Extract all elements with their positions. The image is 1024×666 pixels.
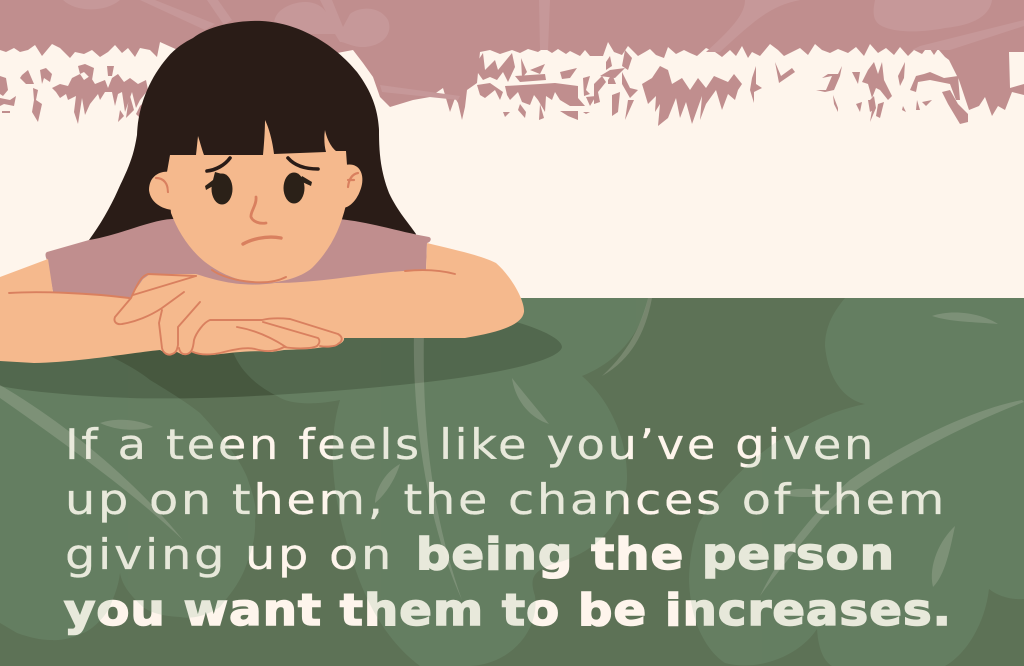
leaf veins and small leaves [0, 298, 1024, 600]
eyes and lashes [205, 172, 312, 204]
shirt [46, 219, 431, 300]
decorative pale leaves on pink band [63, 0, 1024, 100]
arms and hands [0, 243, 524, 363]
line 3 regular: giving up on [65, 530, 394, 579]
panel: torn pink band [0, 0, 1024, 126]
line 2: up on them, the chances of them [65, 475, 947, 524]
background: cream wall [0, 0, 1024, 298]
leaf: right [689, 298, 1024, 666]
nose [251, 197, 266, 223]
leaf: left [0, 298, 256, 640]
panel: green table [0, 298, 1024, 666]
skin line details [9, 270, 455, 355]
shadow under the arms [0, 315, 562, 398]
text block: main message [64, 420, 952, 636]
face [167, 120, 347, 283]
illustration: sad girl resting on arms [0, 21, 524, 363]
pink shards: centre cluster [477, 50, 762, 126]
pink shards: right cluster [775, 62, 968, 124]
mouth [243, 237, 281, 244]
line 1: If a teen feels like you’ve given [65, 420, 876, 469]
hair [80, 21, 416, 262]
ears [149, 164, 362, 210]
leaf pattern overlay [0, 298, 1024, 666]
line 4 bold: you want them to be increases. [64, 585, 952, 636]
eyebrows [207, 158, 318, 171]
line 3 bold: being the person [416, 529, 895, 580]
leaf: centre [233, 298, 648, 666]
pink shards: left cluster [0, 64, 148, 124]
